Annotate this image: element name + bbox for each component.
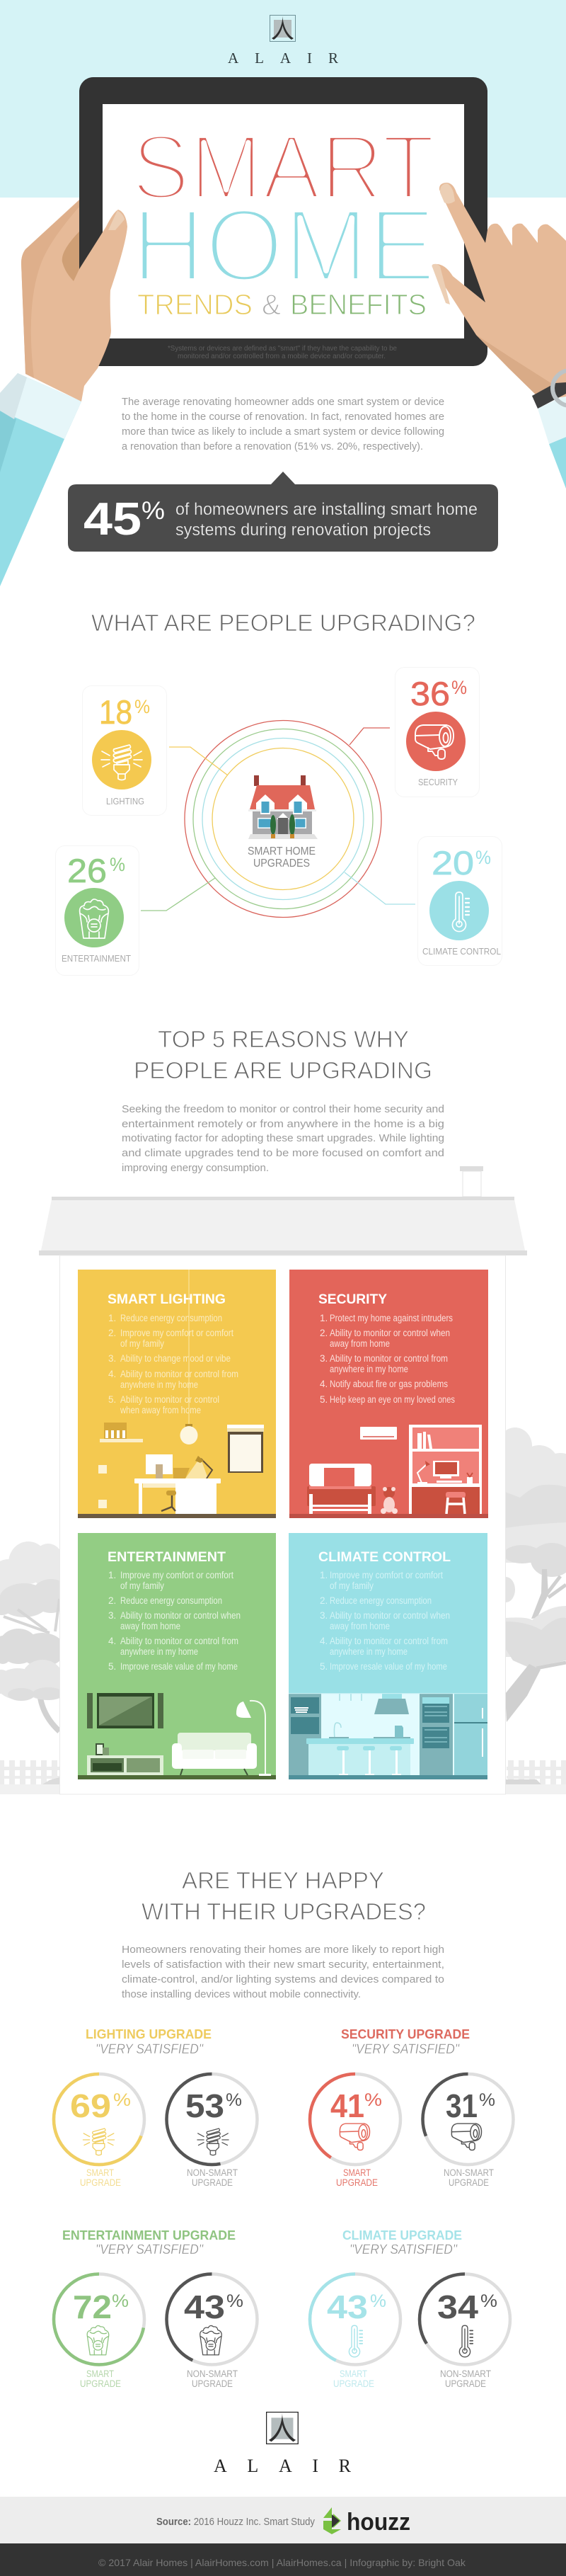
reasons list: 4. [108, 1369, 116, 1379]
reasons list: Improve my comfort or comfort [330, 1570, 443, 1580]
heading: climate upgrade: "VERY SATISFIED" [350, 2242, 458, 2257]
office illustration [98, 1270, 264, 1514]
intro paragraph: a renovation than before a renovation (51% vs. 20%, respectively). [122, 441, 423, 452]
reasons list: anywhere in my home [330, 1364, 408, 1374]
card: climate control 20 percent: 20 [432, 844, 474, 882]
reasons list [320, 1570, 450, 1672]
house shell [39, 1166, 527, 1794]
house illustration [248, 775, 318, 839]
fence [0, 1767, 566, 1794]
donut: lighting smart 69 percent: UPGRADE [80, 2177, 121, 2188]
donut: security smart 41 percent: SMART [343, 2167, 371, 2178]
reasons list: 4. [320, 1636, 328, 1646]
left arm and hand holding tablet [0, 200, 127, 586]
donut: lighting smart 69 percent: 69 [70, 2087, 111, 2124]
title: smart home: BENEFITS [290, 288, 427, 321]
reasons paragraph: motivating factor for adopting these smart upgrades. While lighting [122, 1133, 444, 1144]
heading: entertainment upgrade: ENTERTAINMENT UPGRADE [62, 2228, 236, 2242]
reasons list: 4. [108, 1636, 116, 1646]
reasons list: Improve my comfort or comfort [120, 1570, 233, 1580]
donut: lighting non-smart 53 percent: % [226, 2090, 242, 2110]
heading: climate upgrade [342, 2228, 462, 2257]
source text: Source: 2016 Houzz Inc. Smart Study [156, 2516, 315, 2528]
reasons paragraph: Seeking the freedom to monitor or control their home security and [122, 1104, 444, 1115]
reasons list: 2. [108, 1328, 116, 1338]
reasons list: Ability to change mood or vibe [120, 1353, 231, 1364]
donut: entertainment smart 72 percent: % [112, 2291, 129, 2311]
reasons list: Ability to monitor or control [120, 1394, 219, 1405]
heading: what are people upgrading: WHAT ARE PEOPLE UPGRADING? [91, 610, 475, 636]
donut: lighting smart 69 percent [54, 2074, 144, 2188]
reasons list: 2. [320, 1595, 328, 1606]
heading: security upgrade [341, 2027, 470, 2057]
reasons list: Reduce energy consumption [330, 1595, 432, 1606]
donut: security smart 41 percent: 41 [330, 2087, 364, 2124]
card: entertainment 26 percent: 26 [67, 852, 107, 889]
icon: houzz logo: houzz [347, 2509, 410, 2536]
card: entertainment 26 percent [55, 845, 139, 976]
panel title: SECURITY [318, 1292, 387, 1307]
card: climate control 20 percent: CLIMATE CONTROL [422, 947, 501, 957]
donut: climate non-smart 34 percent: % [480, 2291, 497, 2311]
panel title: ENTERTAINMENT [108, 1550, 226, 1565]
intro paragraph: to the home in the course of renovation. In fact, renovated homes are [122, 411, 444, 423]
reasons list: Improve resale value of my home [120, 1661, 238, 1672]
panel: security [289, 1270, 488, 1518]
trees and fence behind house [0, 1427, 566, 1794]
heading: are they happy [142, 1867, 426, 1925]
callout: 45 percent: of homeowners are installing smart home [175, 500, 478, 519]
reasons list: 4. [320, 1379, 328, 1389]
icon: houzz logo [323, 2507, 410, 2536]
connector: entertainment [141, 878, 215, 911]
reasons paragraph: and climate upgrades tend to be more focused on comfort and [122, 1148, 444, 1159]
heading: lighting upgrade: "VERY SATISFIED" [96, 2042, 204, 2057]
reasons list: away from home [120, 1621, 180, 1631]
donut: climate smart 43 percent [310, 2274, 400, 2389]
reasons paragraph: entertainment remotely or from anywhere in the home is a big [122, 1119, 444, 1130]
logo: Alair bottom [214, 2412, 352, 2476]
diagram: concentric rings [185, 721, 381, 918]
reasons list: 1. [108, 1313, 116, 1323]
satisfaction paragraph: climate-control, and/or lighting systems and devices compared to [122, 1974, 444, 1985]
reasons list: 1. [108, 1570, 116, 1580]
connector: security [350, 728, 390, 745]
reasons list: Ability to monitor or control from [120, 1369, 238, 1379]
footer band [0, 2543, 566, 2576]
connector: lighting [169, 747, 228, 775]
reasons list: 5. [320, 1394, 328, 1405]
donut: entertainment non-smart 43 percent: % [226, 2291, 243, 2311]
card: lighting 18 percent: LIGHTING [106, 797, 144, 807]
donut: climate smart 43 percent: SMART [340, 2369, 367, 2379]
reasons list: 2. [108, 1595, 116, 1606]
callout: 45 percent: systems during renovation projects [175, 520, 431, 540]
reasons list: anywhere in my home [120, 1379, 198, 1390]
reasons list: Ability to monitor or control from [120, 1636, 238, 1646]
intro paragraph: The average renovating homeowner adds one smart system or device [122, 397, 444, 408]
donut: security non-smart 31 percent: % [479, 2090, 495, 2110]
reasons list: of my family [330, 1580, 374, 1591]
donut: climate non-smart 34 percent: 34 [437, 2289, 478, 2325]
donut: climate non-smart 34 percent [420, 2274, 510, 2389]
heading: climate upgrade: CLIMATE UPGRADE [342, 2228, 462, 2242]
card: climate control 20 percent: % [475, 847, 491, 868]
donut: entertainment smart 72 percent: UPGRADE [80, 2378, 121, 2389]
group: security upgrade satisfaction [310, 2027, 514, 2188]
card: security 36 percent: % [451, 677, 467, 698]
satisfaction paragraph: those installing devices without mobile connectivity. [122, 1989, 361, 2000]
card: lighting 18 percent: 18 [99, 693, 132, 731]
logo: Alair top: ALAIR [228, 50, 338, 67]
donut: security smart 41 percent [310, 2074, 400, 2188]
reasons list: Ability to monitor or control when [330, 1328, 450, 1338]
donut: climate non-smart 34 percent: UPGRADE [445, 2378, 486, 2389]
kitchen illustration [289, 1693, 487, 1775]
right tree [497, 1427, 566, 1722]
card: climate control 20 percent [417, 837, 502, 966]
reasons list: Improve resale value of my home [330, 1661, 447, 1672]
reasons list [108, 1570, 241, 1672]
donut: entertainment non-smart 43 percent: 43 [184, 2289, 225, 2325]
reasons list: when away from home [120, 1405, 201, 1415]
reasons list: Help keep an eye on my loved ones [330, 1394, 455, 1405]
heading: top 5 reasons: TOP 5 REASONS WHY [158, 1026, 409, 1052]
donut: climate non-smart 34 percent: NON-SMART [440, 2369, 491, 2379]
center label: smart home upgrades: UPGRADES [253, 857, 310, 870]
donut: entertainment smart 72 percent: SMART [86, 2369, 114, 2379]
heading: lighting upgrade: LIGHTING UPGRADE [86, 2027, 212, 2041]
donut: security smart 41 percent: UPGRADE [336, 2177, 378, 2188]
reasons list: Ability to monitor or control when [330, 1610, 450, 1621]
heading: top 5 reasons: PEOPLE ARE UPGRADING [134, 1057, 432, 1083]
reasons list: Protect my home against intruders [330, 1313, 453, 1323]
heading: security upgrade: SECURITY UPGRADE [341, 2027, 470, 2041]
title: smart home: TRENDS [137, 288, 253, 321]
reasons paragraph [122, 1104, 444, 1174]
reasons list: 5. [320, 1661, 328, 1672]
group: lighting upgrade satisfaction [54, 2027, 258, 2188]
reasons list: Notify about fire or gas problems [330, 1379, 448, 1389]
reasons list: 5. [108, 1661, 116, 1672]
card: security 36 percent: SECURITY [418, 777, 458, 787]
logo: Alair top [228, 16, 338, 67]
heading: lighting upgrade [86, 2027, 212, 2057]
heading: top 5 reasons [134, 1026, 432, 1083]
title: smart home [132, 115, 436, 321]
center label: smart home upgrades: SMART HOME [248, 845, 316, 857]
reasons list: 3. [320, 1353, 328, 1364]
donut: climate smart 43 percent: UPGRADE [333, 2378, 374, 2389]
footer band: © 2017 Alair Homes | AlairHomes.com | AlairHomes.ca | Infographic by: Bright Oak [98, 2557, 466, 2568]
reasons list: Ability to monitor or control when [120, 1610, 241, 1621]
reasons list: Ability to monitor or control from [330, 1636, 448, 1646]
heading: entertainment upgrade: "VERY SATISFIED" [96, 2242, 204, 2257]
heading: entertainment upgrade [62, 2228, 236, 2257]
donut: lighting smart 69 percent: % [113, 2090, 131, 2110]
panel: smart lighting [78, 1270, 276, 1518]
title: smart home: SMART [132, 115, 435, 219]
donut: lighting non-smart 53 percent: UPGRADE [192, 2177, 233, 2188]
reasons list: Improve my comfort or comfort [120, 1328, 233, 1338]
right arm and hand tapping tablet [432, 183, 566, 489]
reasons list: 2. [320, 1328, 328, 1338]
callout: 45 percent: % [142, 497, 165, 525]
living room illustration [87, 1693, 271, 1776]
tablet footnote: *Systems or devices are defined as "smart" if they have the capability to be [168, 345, 397, 353]
reasons list: Reduce energy consumption [120, 1313, 222, 1323]
reasons list: anywhere in my home [120, 1646, 198, 1657]
reasons list: of my family [120, 1338, 164, 1349]
donut: lighting non-smart 53 percent: NON-SMART [187, 2167, 238, 2178]
satisfaction paragraph: Homeowners renovating their homes are more likely to report high [122, 1944, 444, 1956]
source band [0, 2497, 566, 2543]
reasons list: 3. [108, 1353, 116, 1364]
reasons list [320, 1313, 455, 1405]
card: security 36 percent: 36 [410, 675, 450, 712]
card: entertainment 26 percent: % [110, 854, 125, 875]
donut: security non-smart 31 percent: NON-SMART [444, 2167, 494, 2178]
reasons paragraph: improving energy consumption. [122, 1163, 269, 1174]
connector: climate [345, 872, 415, 904]
reasons list: 1. [320, 1570, 328, 1580]
title: smart home: HOME [132, 188, 436, 304]
donut: entertainment non-smart 43 percent [167, 2274, 258, 2389]
group: climate upgrade satisfaction [310, 2228, 510, 2389]
donut: lighting smart 69 percent: SMART [86, 2167, 114, 2178]
heading: are they happy: WITH THEIR UPGRADES? [142, 1898, 426, 1925]
card: security 36 percent [395, 667, 480, 797]
left tree [0, 1541, 71, 1731]
panel: entertainment [78, 1533, 276, 1779]
donut: entertainment non-smart 43 percent: NON-SMART [187, 2369, 238, 2379]
reasons list [108, 1313, 238, 1415]
donut: climate smart 43 percent: % [370, 2291, 386, 2311]
group: entertainment upgrade satisfaction [54, 2228, 258, 2389]
panel title: CLIMATE CONTROL [318, 1550, 451, 1565]
donut: security non-smart 31 percent [423, 2074, 514, 2188]
reasons list: Reduce energy consumption [120, 1595, 222, 1606]
logo: Alair bottom: ALAIR [214, 2456, 352, 2476]
donut: security non-smart 31 percent: 31 [446, 2087, 478, 2124]
satisfaction paragraph [122, 1944, 444, 2000]
heading: are they happy: ARE THEY HAPPY [182, 1867, 384, 1893]
reasons list: 3. [320, 1610, 328, 1621]
donut: security smart 41 percent: % [364, 2090, 382, 2110]
card: lighting 18 percent [82, 685, 167, 816]
tablet footnote: monitored and/or controlled from a mobile device and/or computer. [178, 353, 386, 360]
panel title: SMART LIGHTING [108, 1292, 226, 1307]
panel: climate control [289, 1533, 487, 1779]
donut: entertainment smart 72 percent [54, 2274, 144, 2389]
card: entertainment 26 percent: ENTERTAINMENT [62, 954, 131, 964]
intro paragraph [122, 397, 444, 452]
bedroom illustration [307, 1425, 482, 1514]
reasons list: 3. [108, 1610, 116, 1621]
intro paragraph: more than twice as likely to include a smart system or device following [122, 426, 444, 438]
donut: entertainment non-smart 43 percent: UPGRADE [192, 2378, 233, 2389]
reasons list: anywhere in my home [330, 1646, 408, 1657]
reasons list: 5. [108, 1394, 116, 1405]
donut: lighting non-smart 53 percent: 53 [185, 2087, 224, 2124]
reasons list: away from home [330, 1338, 390, 1349]
hero background [0, 0, 566, 198]
center label: smart home upgrades [248, 845, 316, 870]
reasons list: Ability to monitor or control from [330, 1353, 448, 1364]
donut: security non-smart 31 percent: UPGRADE [449, 2177, 489, 2188]
donut: climate smart 43 percent: 43 [327, 2289, 368, 2325]
reasons list: 1. [320, 1313, 328, 1323]
reasons list: away from home [330, 1621, 390, 1631]
heading: security upgrade: "VERY SATISFIED" [352, 2042, 460, 2057]
tablet device [79, 77, 487, 366]
donut: entertainment smart 72 percent: 72 [73, 2289, 112, 2325]
callout: 45 percent [68, 472, 498, 552]
callout: 45 percent: 45 [83, 493, 142, 545]
card: lighting 18 percent: % [134, 696, 150, 717]
satisfaction paragraph: levels of satisfaction with their new smart security, entertainment, [122, 1959, 444, 1971]
title: smart home: & [262, 288, 281, 321]
donut: lighting non-smart 53 percent [167, 2074, 258, 2188]
tablet footnote [168, 345, 397, 360]
reasons list: of my family [120, 1580, 164, 1591]
